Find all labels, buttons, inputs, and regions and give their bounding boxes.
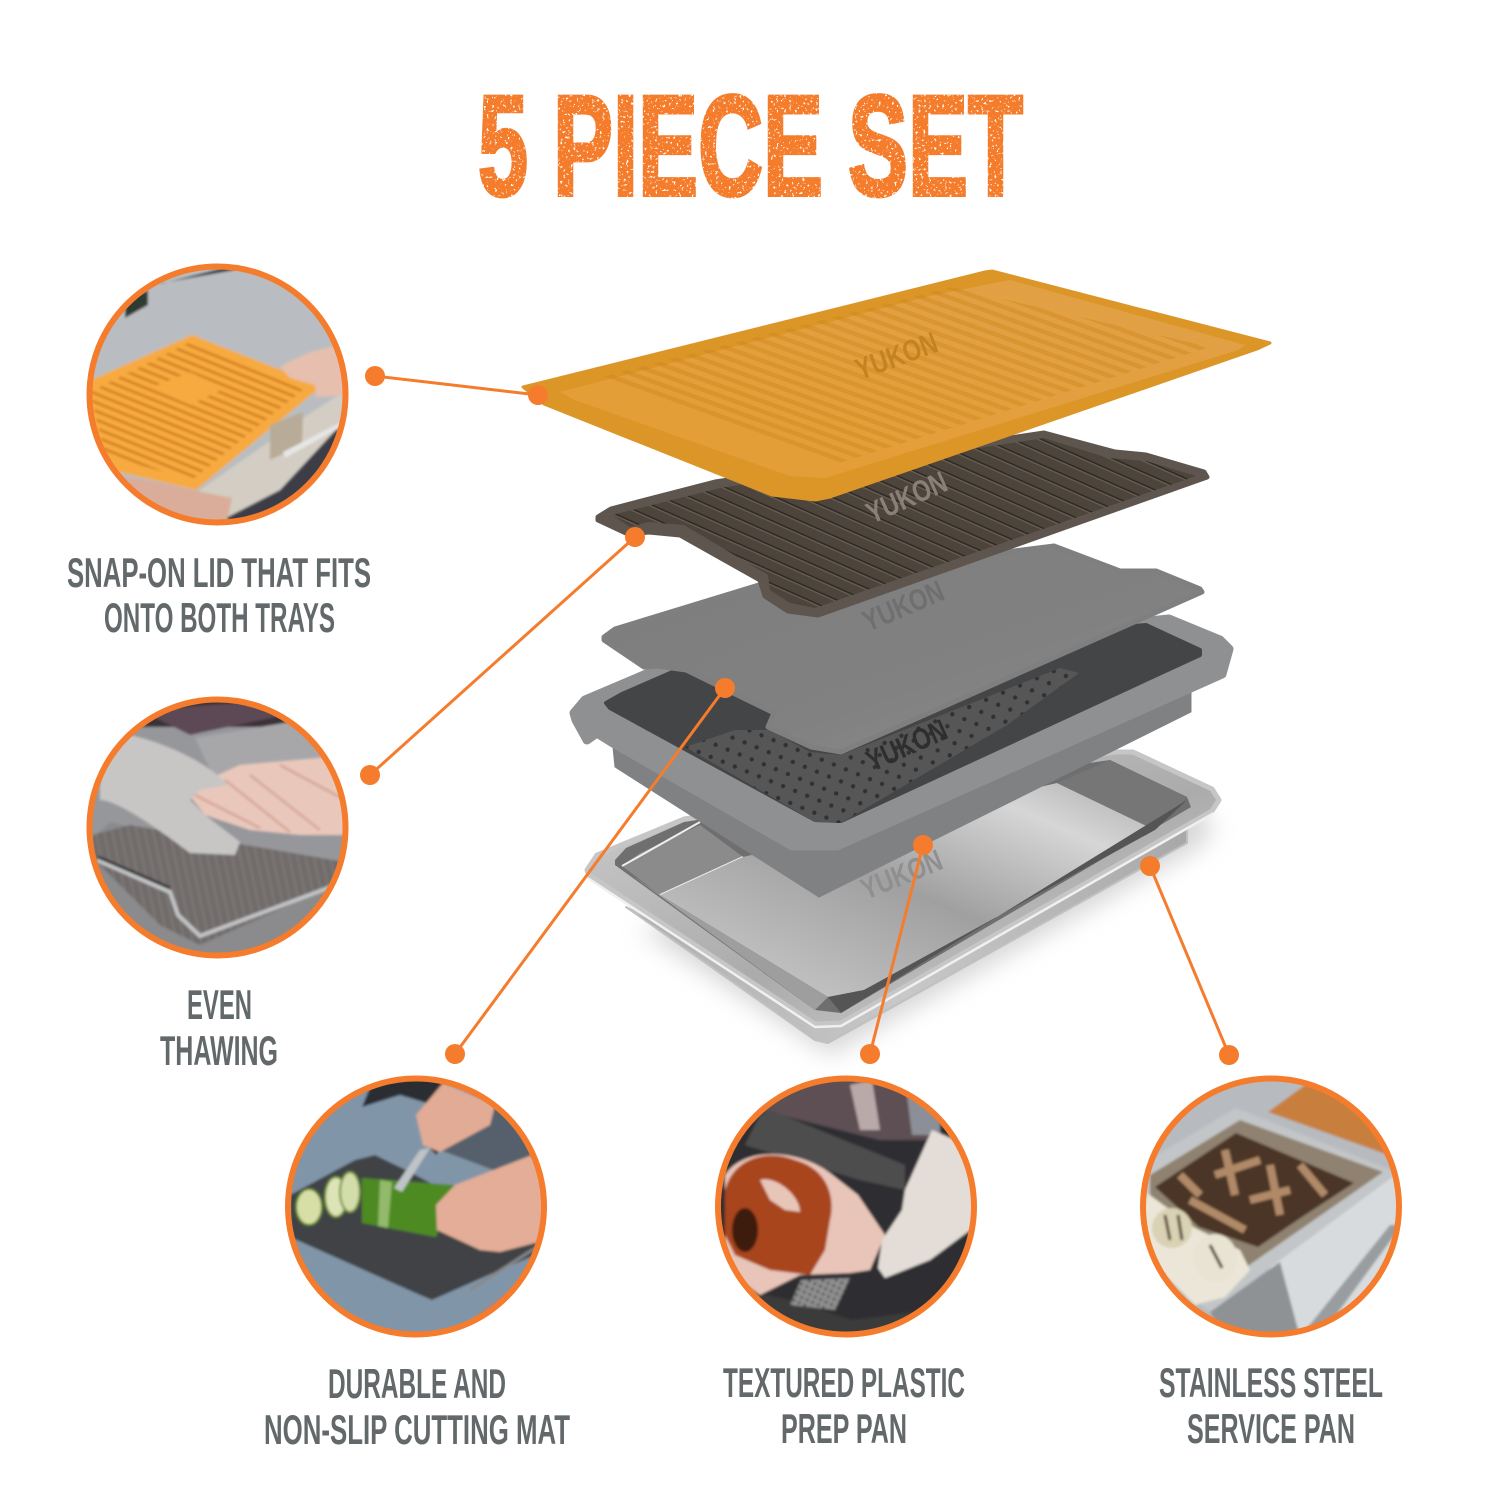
- product: stainless steel service pan: [586, 752, 1219, 1055]
- label: snap-on lid: ONTO BOTH TRAYS: [104, 594, 335, 641]
- product: textured plastic prep pan: YUKON: [861, 714, 952, 778]
- label: prep pan: [723, 1359, 965, 1452]
- connector: lid: [365, 366, 548, 405]
- label: even thawing: EVEN: [187, 981, 252, 1028]
- product: brown thawing tray: [598, 433, 1207, 615]
- label: cutting mat: DURABLE AND: [328, 1360, 506, 1407]
- label: snap-on lid: [67, 549, 371, 641]
- product: textured plastic prep pan: [574, 619, 1229, 897]
- label: cutting mat: [264, 1360, 570, 1453]
- connector: cutting mat: [445, 678, 735, 1064]
- label: service pan: SERVICE PAN: [1187, 1405, 1355, 1452]
- connector: prep pan: [860, 835, 933, 1064]
- photo: prep pan: [715, 1075, 977, 1337]
- label: cutting mat: NON-SLIP CUTTING MAT: [264, 1406, 570, 1453]
- label: snap-on lid: SNAP-ON LID THAT FITS: [67, 549, 371, 596]
- product: orange snap-on lid: YUKON: [851, 326, 942, 387]
- photo: even thawing: [85, 695, 351, 961]
- product: cutting mat: [604, 546, 1202, 752]
- product: stainless steel service pan: YUKON: [856, 844, 947, 906]
- label: even thawing: THAWING: [160, 1027, 278, 1074]
- connector: service pan: [1140, 856, 1239, 1065]
- photo: service pan: [1140, 1075, 1402, 1337]
- label: prep pan: TEXTURED PLASTIC: [723, 1359, 965, 1406]
- connector: thawing tray: [360, 527, 645, 785]
- label: service pan: [1159, 1359, 1383, 1452]
- product: cutting mat: YUKON: [858, 575, 949, 638]
- product: brown thawing tray: YUKON: [861, 466, 952, 530]
- photo: snap-on lid: [80, 262, 351, 530]
- photo: cutting mat: [285, 1075, 547, 1337]
- label: prep pan: PREP PAN: [781, 1405, 907, 1452]
- title: 5 PIECE SET: [478, 67, 1023, 226]
- label: even thawing: [160, 981, 278, 1074]
- product: orange snap-on lid: [523, 271, 1270, 500]
